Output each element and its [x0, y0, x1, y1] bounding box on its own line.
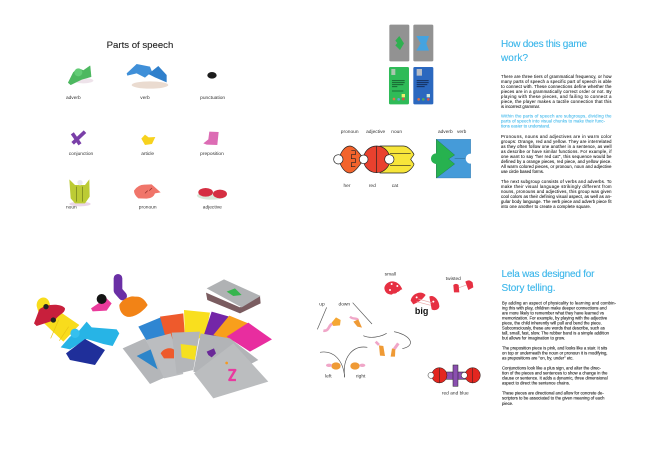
text block: grammatical frequency: to connect with. These connections define whether the	[501, 84, 612, 89]
diagram: red and blue conjunction	[428, 365, 480, 386]
text block: physicality: ing this with play, children make deeper connections and	[502, 306, 607, 310]
labels: story words	[319, 272, 469, 397]
piece: small adjective	[384, 281, 402, 295]
title: Parts of speech	[107, 40, 173, 51]
diagram: her red cat chain	[334, 146, 414, 173]
piece: verb: verb	[140, 95, 150, 101]
piece: adjective	[197, 188, 227, 211]
piece: noun	[66, 179, 91, 211]
text block: cool colors: into one another to create a complete square.	[501, 204, 591, 209]
piece: verb	[127, 64, 168, 101]
panel: story telling illustrations	[317, 272, 480, 397]
text block: cool colors: gular body language. The verb piece and adverb piece fit	[501, 199, 612, 204]
text block: cool colors	[501, 179, 612, 209]
text block: physicality	[502, 300, 617, 340]
text block: warm colors: Pronouns, nouns and adjectives are in warm color	[501, 134, 612, 139]
text block: warm colors: All warm colored pieces, or pronoun, noun and adjective	[501, 164, 612, 169]
card: blue card	[413, 67, 433, 104]
text block: directional pieces: These pieces are directional and allow for concrete de-	[502, 390, 604, 396]
labels: diagram words: cat	[392, 183, 399, 189]
text block: grammatical frequency: is incorrect grammar.	[501, 104, 540, 109]
text block: subgroups highlight	[501, 114, 612, 128]
piece: big adjective with rubber band	[411, 293, 439, 310]
text block: grammatical frequency: many parts of speech a specific part of speech is able	[501, 79, 612, 84]
labels: story words: small	[385, 272, 396, 278]
text block: grammatical frequency: piece, the player makes a tactile connection that this	[501, 99, 612, 104]
text block: subgroups highlight: Within the parts of speech are subgroups, dividing the	[501, 114, 612, 118]
piece: twisted adjective	[453, 280, 473, 292]
labels: story words: left	[325, 373, 332, 379]
pieces: yellow red blue stack	[34, 298, 119, 365]
text block: preposition: as prepositions are "on, by, under" etc.	[502, 356, 574, 360]
labels: diagram words: pronoun	[341, 129, 359, 135]
labels: story words: twisted	[446, 276, 461, 282]
labels: story words: red and blue	[442, 391, 469, 397]
labels: story words: down	[339, 301, 350, 307]
heading: How does this game	[501, 39, 587, 50]
card: grey verb card	[413, 25, 433, 61]
piece: punctuation: punctuation	[200, 95, 225, 101]
heading: work?	[500, 53, 528, 64]
text block: cool colors: cool colors as their defining visual aspect, as well as an-	[501, 194, 612, 199]
text block: warm colors: use circle based forms.	[501, 169, 544, 174]
text block: conjunctions: Conjunctions look like a plus sign, and alter the direc-	[502, 366, 602, 370]
piece: pronoun: pronoun	[139, 205, 157, 211]
text block: conjunctions: aspect to direct the sentence chains.	[502, 380, 570, 386]
text block: physicality: Subconsciously, these are words that describe, such as	[502, 326, 605, 330]
text block: preposition	[502, 346, 607, 360]
text block: warm colors	[501, 134, 612, 174]
heading: Story telling.	[502, 283, 556, 294]
piece: punctuation	[200, 72, 225, 101]
panel: game cards and diagrams	[334, 25, 476, 189]
text block: physicality: but allows for imagination to grow.	[502, 336, 565, 340]
piece: preposition	[200, 132, 224, 157]
piece: preposition: preposition	[200, 151, 224, 157]
piece: adverb	[66, 66, 93, 101]
card: green card	[389, 67, 409, 104]
arrow: up	[317, 307, 327, 329]
text block: warm colors: as describe or have similar functions. For example, if	[501, 149, 612, 154]
piece: adjective: adjective	[203, 205, 222, 211]
text block: warm colors: as they often follow one another in a sentence, as well	[501, 144, 612, 149]
photo: game pieces and fanned cards	[34, 278, 272, 398]
text block: subgroups highlight: tions easier to understand.	[501, 124, 550, 128]
panel: parts of speech	[66, 40, 227, 211]
text block: grammatical frequency: playing with these pieces, and failing to connect a	[501, 94, 612, 99]
text block: subgroups highlight: parts of speech into visual chunks to make their func-	[501, 118, 606, 124]
text block: conjunctions: tion of the pieces and sentences to show a change in the	[502, 370, 608, 376]
fanned grey cards	[123, 332, 268, 398]
text block: physicality: memorization. For example, by playing with the adjective	[502, 316, 608, 320]
text block: warm colors: one want to say "her red cat", this sequence would be	[501, 154, 612, 159]
text block: physicality: are more likely to remember what they have learned vs	[502, 310, 604, 316]
piece: conjunction: conjunction	[69, 151, 94, 157]
labels: diagram words: adverb	[438, 129, 453, 135]
text block: cool colors: make their visual language strikingly different from	[501, 184, 612, 189]
labels: diagram words: her	[344, 183, 351, 189]
text block: physicality: By adding an aspect of physicality to learning and combin-	[502, 300, 617, 306]
text block: grammatical frequency: There are three tiers of grammatical frequency, or how	[501, 74, 612, 79]
card deck	[206, 279, 261, 313]
labels: story words: right	[356, 373, 366, 379]
piece: pronoun	[134, 184, 161, 211]
text block: cool colors: nouns, pronouns and adjectives, this group was given	[501, 189, 612, 194]
piece: article: article	[141, 151, 154, 157]
heading	[502, 269, 595, 294]
pieces: purple pink black orange cluster	[91, 278, 148, 317]
labels: diagram words: noun	[391, 130, 402, 135]
labels: diagram words: adjective	[366, 129, 386, 135]
arrows: curved direction lines	[320, 332, 411, 377]
text block: grammatical frequency: pieces are in a grammatically correct order or not. By	[501, 89, 612, 94]
pieces: side prepositions	[376, 342, 398, 357]
text block: grammatical frequency	[501, 74, 612, 109]
text block: preposition: The preposition piece is pink, and looks like a stair. It sits	[502, 346, 607, 350]
arrow: down	[353, 303, 372, 324]
text block: conjunctions	[502, 366, 608, 386]
piece: adverb: adverb	[66, 95, 81, 101]
labels: diagram words: red	[369, 183, 376, 189]
text block: directional pieces: scriptors to be associated to the given meaning of each	[502, 396, 605, 400]
heading: Lela was designed for	[502, 269, 595, 280]
text block: preposition: on top or underneath the noun or pronoun it is modifying,	[502, 350, 607, 356]
fanned coloured cards	[138, 310, 272, 352]
text block: physicality: piece, the child inherently will pull and bend the piece.	[502, 320, 602, 326]
panel: how does this game work text	[500, 39, 612, 209]
text block: cool colors: The next subgroup consists of verbs and adverbs. To	[501, 179, 612, 184]
labels: diagram words	[341, 129, 467, 189]
text block: conjunctions: clause or sentence. It adds a dynamic, three dimensional	[502, 376, 608, 380]
heading	[500, 39, 587, 64]
text block: directional pieces	[502, 390, 605, 406]
piece: conjunction	[69, 132, 94, 157]
piece: article	[141, 135, 155, 157]
pieces: left and right prepositions	[326, 362, 365, 370]
text block: directional pieces: piece.	[502, 401, 513, 406]
label: big: big	[415, 306, 428, 316]
card: grey adverb card	[389, 25, 409, 61]
piece: noun: noun	[66, 206, 77, 211]
pieces: up and down prepositions	[323, 317, 362, 331]
diagram: adverb verb square	[431, 139, 476, 178]
labels: story words: up	[319, 302, 325, 307]
text block: physicality: tall, small, fast, slow. The rubber band is a simple addition	[502, 330, 610, 336]
labels: diagram words: verb	[457, 129, 467, 135]
text block: warm colors: defined by a orange pieces, red piece, and yellow piece.	[501, 159, 612, 164]
text block: warm colors: groups: Orange, red and yellow. They are interrelated	[501, 139, 612, 144]
panel: Lela story telling text	[502, 269, 617, 406]
